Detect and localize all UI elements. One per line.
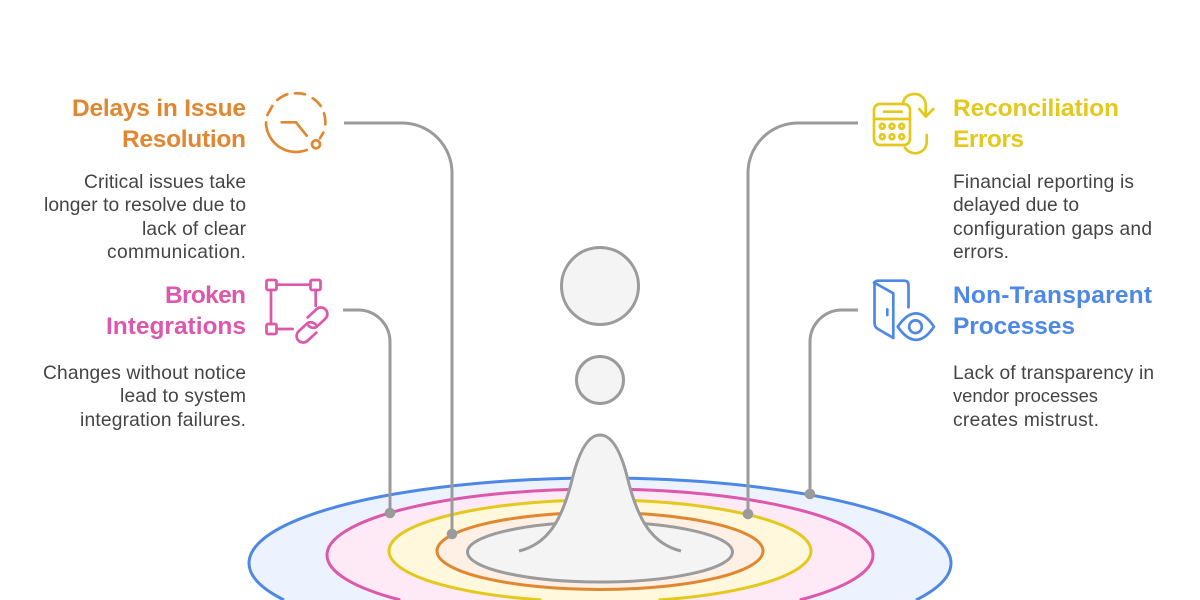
text: delays: lack of clear [142, 219, 247, 240]
droplet peak outline [519, 435, 681, 551]
heading: integrations: Integrations [106, 313, 246, 340]
connectors [343, 123, 858, 534]
text: integrations: lead to system [120, 386, 246, 407]
text: reconciliation: configuration gaps and [953, 219, 1152, 240]
text: integrations: Changes without notice [43, 363, 246, 384]
heading: reconciliation [953, 95, 1119, 153]
heading: reconciliation: Errors [953, 126, 1024, 153]
icon: calculator [874, 94, 933, 153]
icon: link nodes [266, 280, 333, 345]
connector: integrations [343, 310, 390, 513]
heading: delays: Delays in Issue [72, 95, 246, 122]
ring: reconciliation errors [389, 500, 811, 600]
text: delays: longer to resolve due to [44, 195, 246, 216]
heading: delays: Resolution [122, 126, 246, 153]
text: transparency: vendor processes [953, 385, 1098, 406]
text: integrations [43, 363, 246, 431]
ring: broken integrations [327, 489, 873, 600]
text: transparency: Lack of transparency in [953, 363, 1154, 384]
connector: reconciliation [748, 123, 858, 514]
heading: delays [72, 95, 246, 153]
text: delays: Critical issues take [84, 172, 246, 193]
text: transparency [953, 363, 1154, 431]
text: reconciliation: errors. [953, 242, 1009, 263]
text: delays [44, 172, 247, 263]
text: reconciliation: Financial reporting is [953, 172, 1134, 193]
ring: centre [468, 522, 732, 582]
text: reconciliation: delayed due to [953, 195, 1079, 216]
text: transparency: creates mistrust. [953, 410, 1099, 431]
connector dots [385, 489, 815, 539]
heading: reconciliation: Reconciliation [953, 95, 1119, 122]
icon: clock [266, 93, 325, 152]
ring: non-transparent processes [249, 478, 951, 600]
heading: integrations [106, 282, 246, 340]
large droplet [562, 248, 638, 324]
ring: delays in issue resolution [437, 512, 763, 590]
heading: transparency [953, 282, 1152, 340]
text: integrations: integration failures. [80, 410, 246, 431]
connector: transparency [810, 310, 858, 494]
small droplet [576, 356, 624, 404]
text: delays: communication. [107, 242, 246, 263]
heading: transparency: Non-Transparent [953, 282, 1152, 309]
heading: integrations: Broken [165, 282, 246, 309]
heading: transparency: Processes [953, 313, 1075, 340]
droplet peak [519, 435, 681, 575]
icon: door and eye [874, 281, 934, 340]
connector: delays [344, 123, 452, 534]
concentric rings [249, 478, 951, 600]
text: reconciliation [953, 172, 1152, 263]
